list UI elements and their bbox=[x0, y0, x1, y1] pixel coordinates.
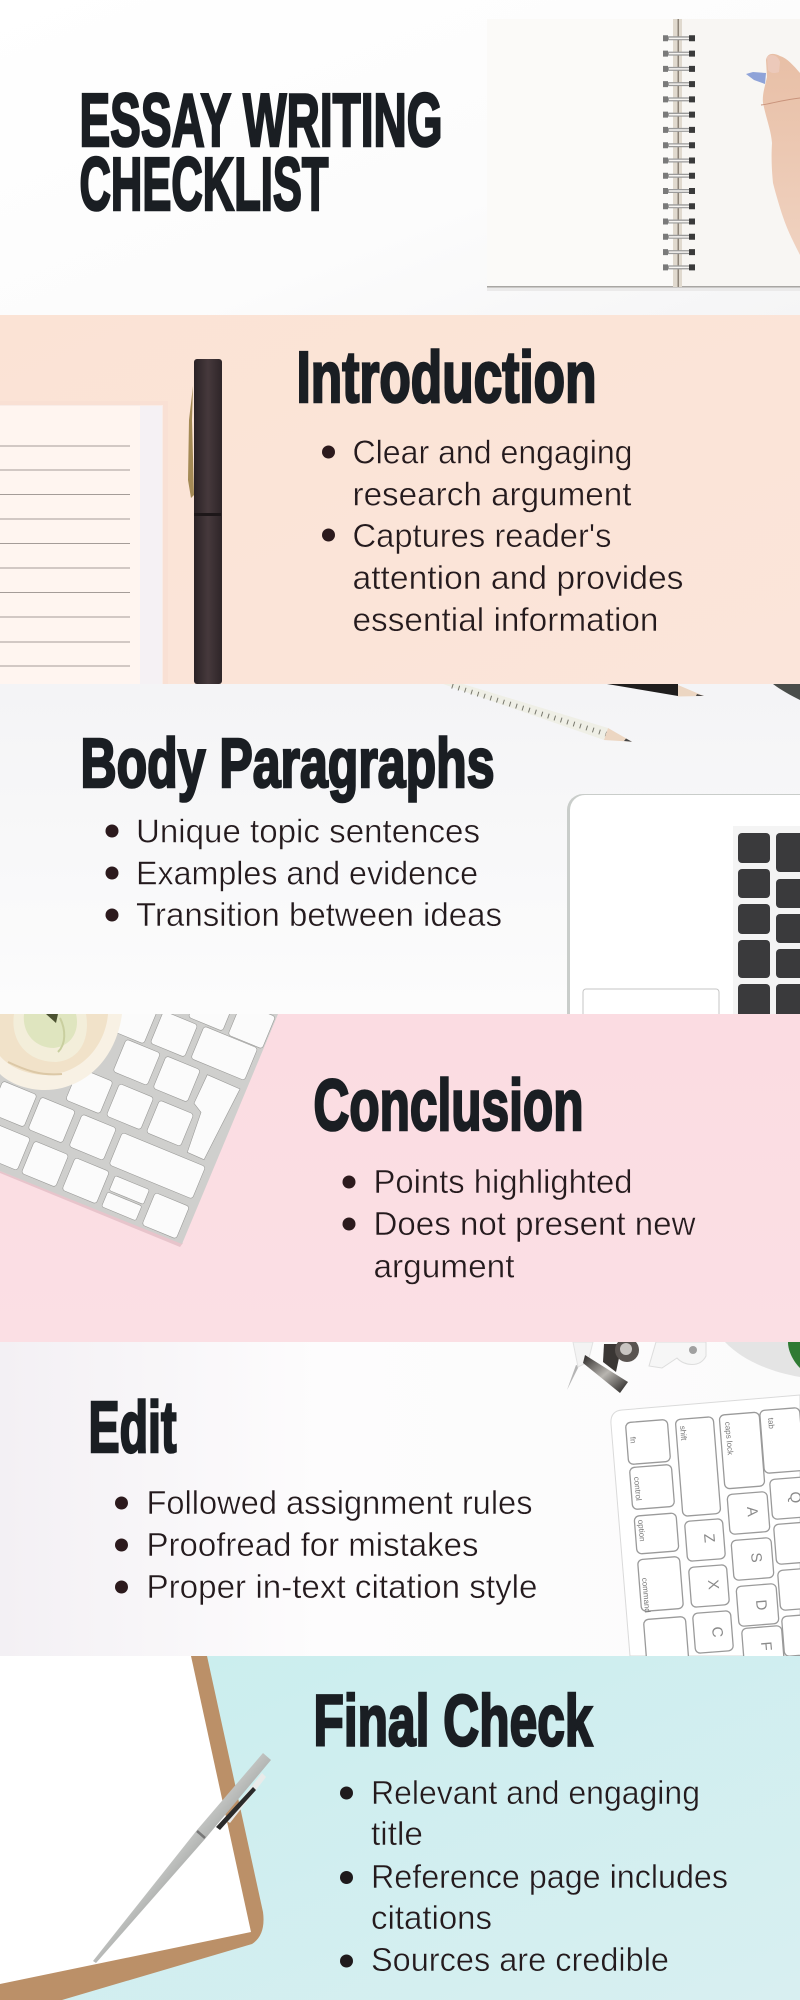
icon: white keyboard outline: caps lock bbox=[723, 1421, 735, 1456]
list: conclusion points: Points highlighted bbox=[374, 1164, 632, 1201]
list: introduction points: Captures reader's bbox=[352, 518, 612, 555]
panel: header bbox=[80, 19, 800, 315]
icon: white keyboard outline: tab bbox=[766, 1417, 776, 1430]
list: body points bbox=[106, 818, 501, 926]
icon: white keyboard outline: A bbox=[743, 1506, 761, 1517]
icon: white keyboard outline: control bbox=[632, 1476, 643, 1501]
list: final check points: Relevant and engaging bbox=[371, 1775, 700, 1812]
heading: introduction: Introduction bbox=[296, 338, 596, 418]
icon: white keyboard outline: option bbox=[636, 1519, 647, 1542]
title: ESSAY WRITING bbox=[80, 78, 442, 162]
panel: introduction bbox=[0, 315, 800, 684]
list: edit points: Followed assignment rules bbox=[146, 1485, 532, 1522]
heading: body paragraphs: Body Paragraphs bbox=[80, 724, 494, 802]
icon: spiral notebook bbox=[487, 19, 800, 291]
icon: white keyboard outline: F bbox=[757, 1641, 775, 1651]
icon: white keyboard bbox=[0, 1014, 278, 1247]
icon: white keyboard outline: S bbox=[747, 1552, 765, 1563]
icon: hand with pen bbox=[746, 54, 800, 255]
icon: cream flower bbox=[0, 1014, 122, 1090]
list: final check points: title bbox=[371, 1816, 423, 1853]
heading: edit: Edit bbox=[88, 1388, 177, 1468]
list: conclusion points: argument bbox=[374, 1248, 515, 1286]
list: introduction points: research argument bbox=[352, 476, 632, 514]
icon: white keyboard outline: shift bbox=[678, 1425, 688, 1442]
icon: clipboard with paper bbox=[0, 1656, 264, 2000]
title bbox=[80, 92, 440, 212]
icon: lined notepad bbox=[0, 401, 168, 684]
title: CHECKLIST bbox=[80, 142, 328, 226]
icon: white keyboard outline: D bbox=[752, 1599, 770, 1611]
list: conclusion points bbox=[342, 1164, 696, 1286]
list: edit points: Proper in-text citation style bbox=[146, 1569, 538, 1606]
list: final check points bbox=[340, 1775, 728, 1979]
list: conclusion points: Does not present new bbox=[374, 1206, 696, 1243]
icon: white keyboard outline: C bbox=[708, 1626, 726, 1638]
icon: pin and binder clip bbox=[567, 1338, 639, 1393]
list: final check points: citations bbox=[371, 1900, 492, 1937]
panel: conclusion bbox=[0, 985, 800, 1342]
icon: striped pencil bbox=[443, 684, 632, 742]
list: edit points bbox=[115, 1485, 538, 1606]
list: body points: Transition between ideas bbox=[136, 897, 502, 934]
icon: black pencil bbox=[607, 684, 800, 700]
heading: conclusion: Conclusion bbox=[314, 1066, 584, 1146]
icon: white keyboard outline bbox=[611, 1395, 800, 1670]
list: introduction points: essential information bbox=[352, 602, 658, 639]
icon: black pen bbox=[188, 359, 222, 684]
icon: white keyboard outline: X bbox=[704, 1579, 722, 1590]
icon: white keyboard outline: Z bbox=[700, 1533, 718, 1543]
icon: white keyboard outline: fn bbox=[628, 1436, 638, 1444]
panel: final check bbox=[0, 1656, 800, 2000]
list: final check points: Sources are credible bbox=[371, 1942, 669, 1979]
icon: laptop bbox=[567, 794, 800, 1035]
list: body points: Unique topic sentences bbox=[136, 814, 480, 850]
heading: final check: Final Check bbox=[314, 1682, 593, 1762]
list: introduction points bbox=[322, 434, 684, 639]
list: final check points: Reference page includes bbox=[371, 1859, 728, 1896]
icon: white clip and plant pot bbox=[649, 1342, 800, 1377]
icon: silver pen bbox=[93, 1753, 271, 1963]
list: introduction points: Clear and engaging bbox=[352, 434, 632, 472]
list: edit points: Proofread for mistakes bbox=[146, 1527, 478, 1564]
panel: edit bbox=[0, 1338, 800, 1670]
icon: white keyboard outline: command bbox=[640, 1577, 652, 1613]
panel: body paragraphs bbox=[0, 684, 800, 1035]
list: body points: Examples and evidence bbox=[136, 856, 478, 892]
list: introduction points: attention and provides bbox=[352, 560, 684, 597]
